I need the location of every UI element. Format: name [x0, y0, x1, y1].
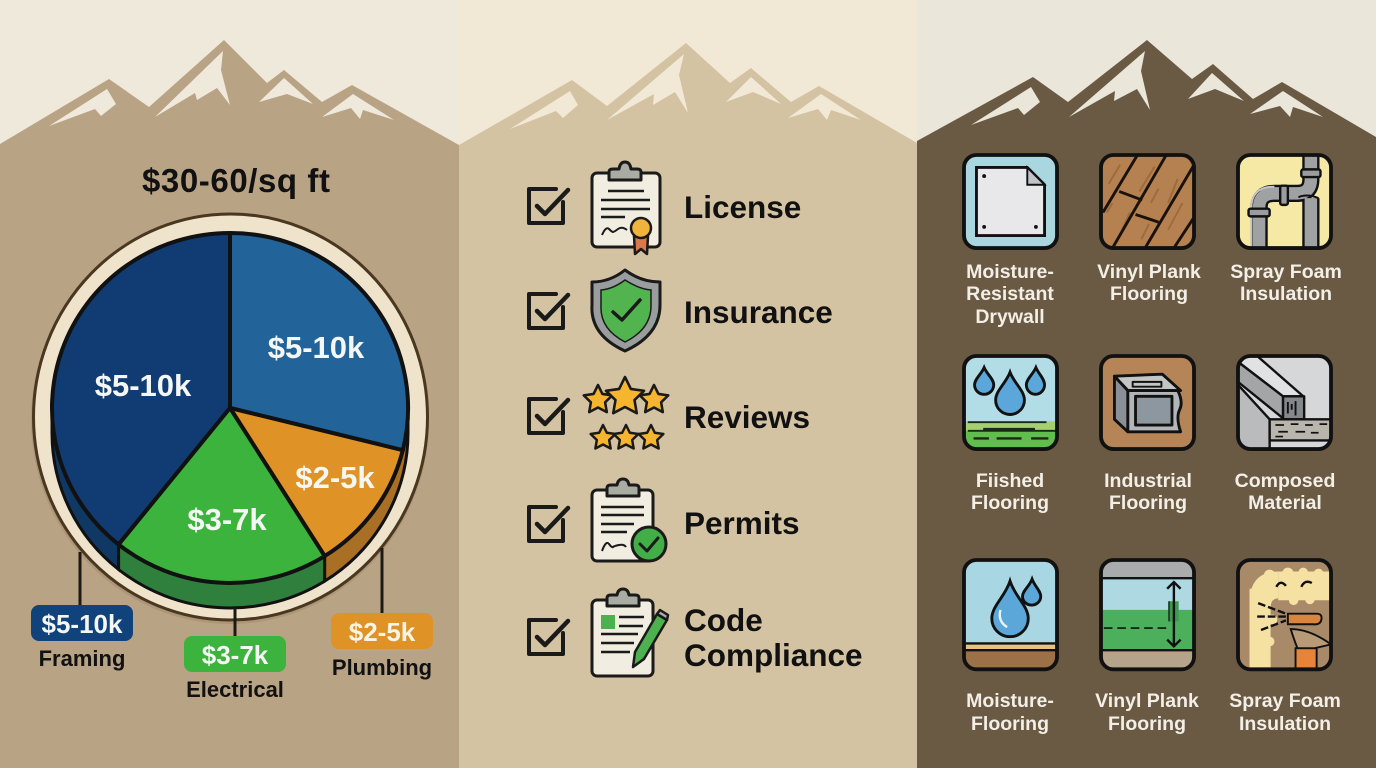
- icon: stars: [584, 377, 668, 449]
- checklist item: license: [529, 162, 801, 254]
- label: finished flooring: Fiished: [976, 470, 1044, 492]
- label: spray foam insulation (applicator): [1229, 690, 1341, 735]
- material: moisture flooring: [964, 560, 1057, 735]
- label: industrial flooring: [1104, 470, 1192, 514]
- heading: cost per square foot: $30-60/sq ft: [142, 162, 330, 199]
- label: code compliance: Code: [684, 602, 763, 638]
- slice: second cost share: [230, 233, 408, 450]
- label: moisture-resistant drywall: Resistant: [966, 283, 1054, 305]
- label: vinyl plank flooring (layers): Vinyl Plank: [1095, 690, 1199, 712]
- label: moisture-resistant drywall: Drywall: [975, 306, 1045, 328]
- callout: plumbing: Plumbing: [332, 655, 432, 680]
- label: code compliance: [684, 602, 863, 673]
- label: permits: Permits: [684, 505, 800, 541]
- mountain header: checklist panel: [459, 43, 917, 768]
- label: spray foam insulation: Spray Foam: [1230, 261, 1342, 283]
- label: vinyl plank flooring (layers): Flooring: [1108, 713, 1186, 735]
- material: moisture-resistant drywall: [964, 155, 1057, 328]
- label: vinyl plank flooring (layers): [1095, 690, 1199, 735]
- checklist item: insurance: [529, 270, 833, 351]
- mountain header: cost panel: [0, 40, 459, 768]
- checklist item: permits: [529, 479, 800, 561]
- icon: drywall sheet: [964, 155, 1057, 248]
- label: industrial flooring: Flooring: [1109, 492, 1187, 514]
- slice: electrical: [119, 408, 325, 583]
- label: code compliance: Compliance: [684, 637, 863, 673]
- callout: electrical: [184, 608, 286, 702]
- slice: plumbing: [230, 408, 403, 556]
- label: vinyl plank flooring: Vinyl Plank: [1097, 261, 1201, 283]
- label: industrial flooring: Industrial: [1104, 470, 1192, 492]
- material: spray foam insulation: [1230, 155, 1342, 305]
- label: moisture flooring: [966, 690, 1054, 735]
- slice labels: $5-10k: [268, 330, 365, 365]
- callout: framing: Framing: [39, 646, 125, 671]
- icon: permit clipboard: [592, 479, 666, 561]
- icon: spray foam gun: [1238, 560, 1331, 669]
- icon: layered beam: [1238, 356, 1333, 449]
- material: vinyl plank flooring (layers): [1095, 560, 1199, 735]
- label: vinyl plank flooring: [1097, 261, 1201, 305]
- label: spray foam insulation: [1230, 261, 1342, 305]
- icon: drops over green floor: [964, 356, 1057, 449]
- label: finished flooring: Flooring: [971, 492, 1049, 514]
- icon: license document: [592, 162, 660, 254]
- label: composed material: Material: [1248, 492, 1322, 514]
- label: insurance: Insurance: [684, 294, 833, 330]
- label: spray foam insulation: Insulation: [1240, 283, 1332, 305]
- checklist item: code compliance: [529, 589, 863, 676]
- panel: cost breakdown: [0, 0, 459, 768]
- icon: shield: [592, 270, 660, 351]
- icon: concrete block: [1101, 356, 1194, 449]
- callout: framing: $5-10k: [42, 609, 123, 639]
- material: spray foam insulation (applicator): [1229, 560, 1341, 735]
- icon: water drops over floor: [964, 560, 1057, 669]
- label: spray foam insulation (applicator): Spray Foam: [1229, 690, 1341, 712]
- label: moisture flooring: Moisture-: [966, 690, 1054, 712]
- slice: framing: [52, 233, 230, 544]
- callout: plumbing: [331, 548, 433, 680]
- icon: compliance clipboard: [592, 589, 668, 676]
- label: vinyl plank flooring: Flooring: [1110, 283, 1188, 305]
- material: vinyl plank flooring: [1097, 155, 1201, 305]
- label: license: License: [684, 189, 801, 225]
- label: moisture flooring: Flooring: [971, 713, 1049, 735]
- slice labels: $2-5k: [295, 460, 375, 495]
- label: composed material: [1235, 470, 1335, 514]
- callout: electrical: Electrical: [186, 677, 284, 702]
- slice labels: $5-10k: [95, 368, 192, 403]
- label: composed material: Composed: [1235, 470, 1335, 492]
- callout: plumbing: $2-5k: [349, 617, 416, 647]
- panel: contractor checklist: [459, 0, 917, 768]
- material: composed material: [1235, 356, 1335, 514]
- icon: floor layer section: [1101, 560, 1194, 669]
- icon: wood planks: [1101, 155, 1194, 248]
- material: industrial flooring: [1101, 356, 1194, 514]
- label: reviews: Reviews: [684, 399, 810, 435]
- icon: pipes: [1238, 155, 1331, 248]
- material: finished flooring: [964, 356, 1057, 514]
- label: finished flooring: [971, 470, 1049, 514]
- slice labels: $3-7k: [187, 502, 267, 537]
- label: moisture-resistant drywall: Moisture-: [966, 261, 1054, 283]
- checklist item: reviews: [529, 377, 810, 449]
- label: moisture-resistant drywall: [966, 261, 1054, 328]
- callout: electrical: $3-7k: [202, 640, 269, 670]
- panel: materials: [917, 0, 1376, 768]
- mountain header: materials panel: [917, 40, 1376, 768]
- label: spray foam insulation (applicator): Insulation: [1239, 713, 1331, 735]
- slice labels: [95, 330, 375, 537]
- callout: framing: [31, 552, 133, 671]
- pie chart: cost breakdown: [31, 214, 429, 624]
